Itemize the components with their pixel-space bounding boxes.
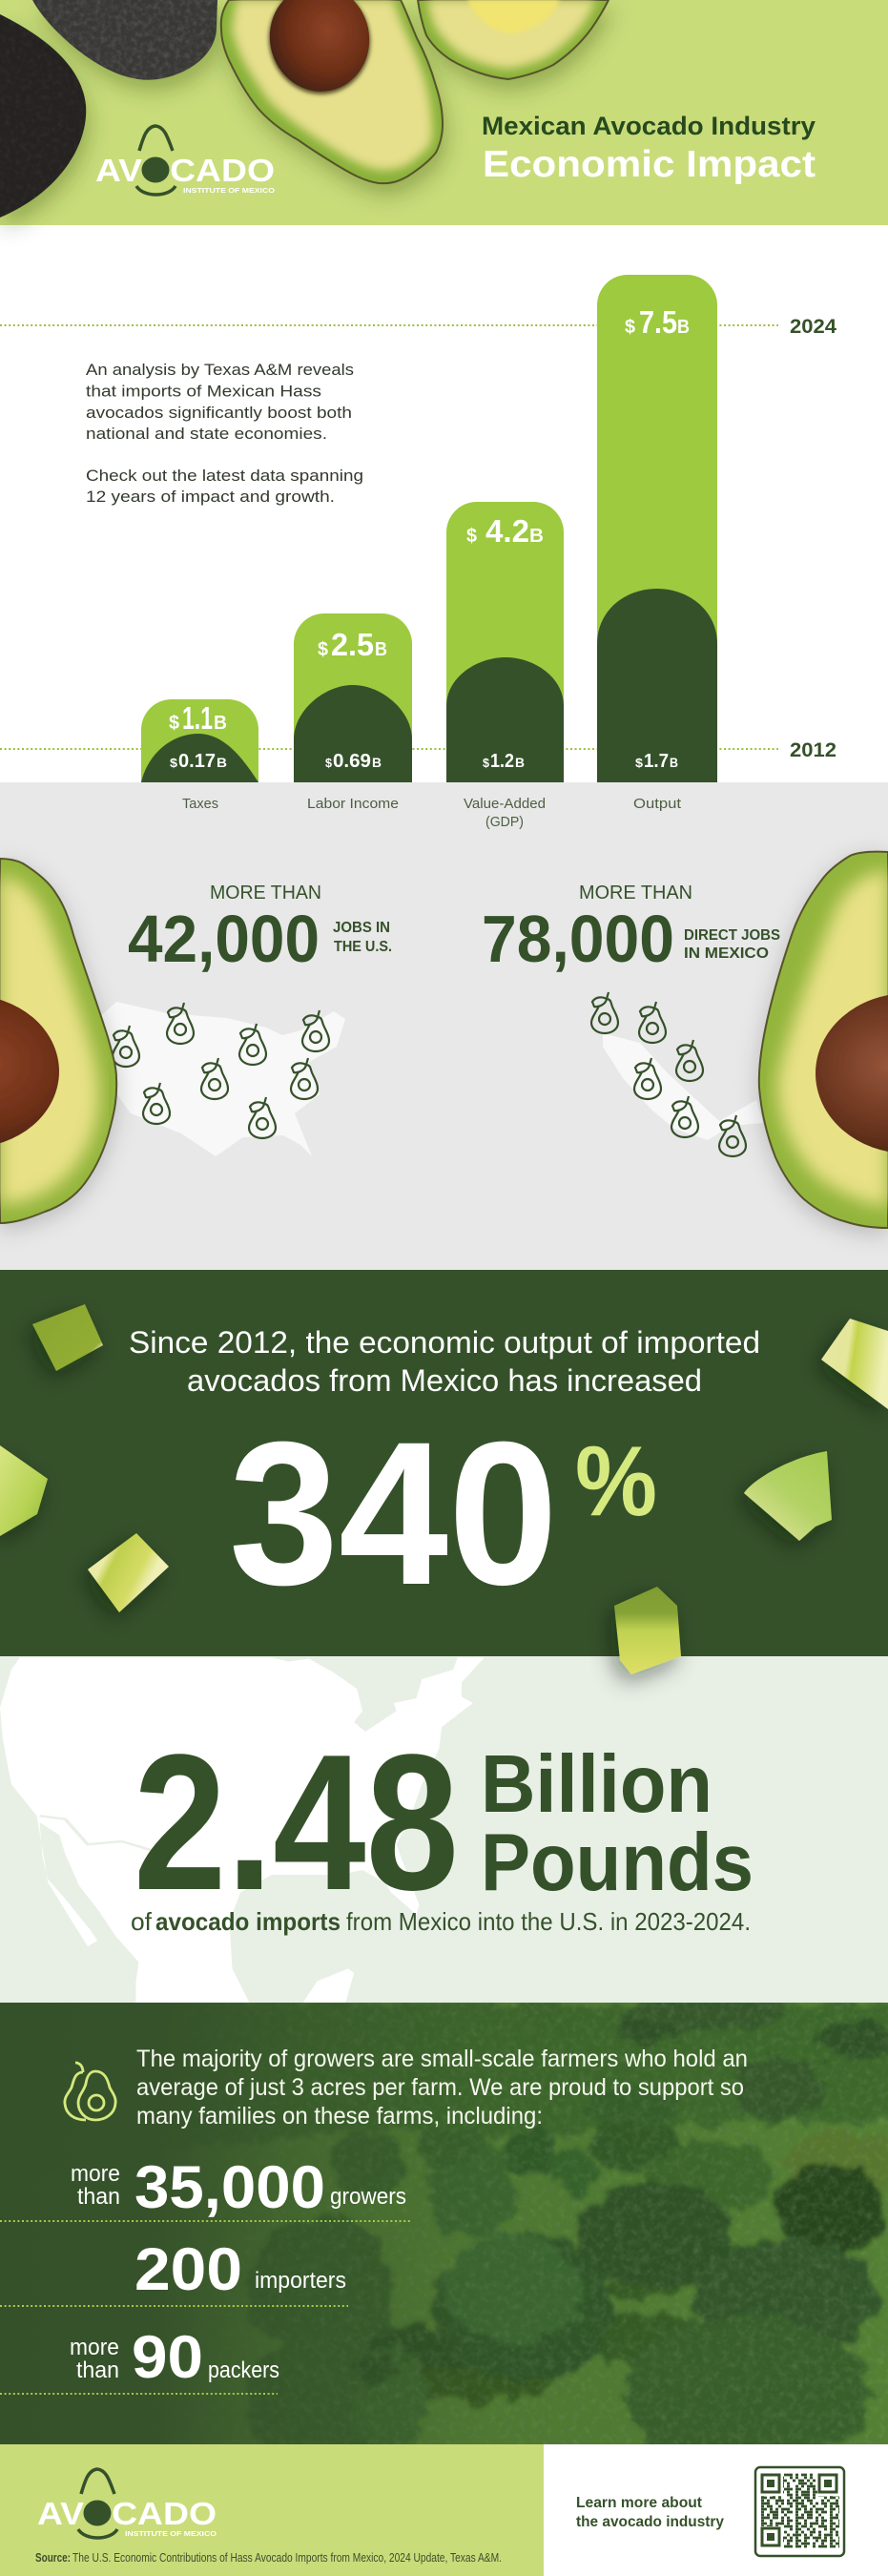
axis labels: (GDP) — [485, 815, 524, 830]
axis labels: Labor Income — [307, 797, 399, 812]
footer logo — [37, 2469, 217, 2538]
stat: 42,000 jobs in the U.S.: MORE THAN — [210, 882, 321, 904]
photo: whole dark avocado top — [29, 0, 219, 86]
photo: avocado chunk left — [0, 1445, 48, 1536]
stat: 90 packers: more — [70, 2335, 119, 2360]
caption: of — [131, 1907, 153, 1936]
intro text: 12 years of impact and growth. — [86, 488, 335, 506]
bar: Value-Added (GDP): 4.2 — [485, 513, 529, 549]
grower text: average of just 3 acres per farm. We are proud to support so — [136, 2074, 744, 2101]
stat: 42,000 jobs in the U.S.: THE U.S. — [334, 939, 392, 955]
bar: Output: 7.5 — [639, 304, 677, 340]
call to action — [576, 2495, 724, 2530]
axis labels: Taxes — [182, 797, 218, 812]
title — [482, 112, 816, 185]
bar: Value-Added (GDP): $ — [483, 756, 490, 770]
panel: orchard photo — [0, 1996, 888, 2470]
photo: avocado half left — [0, 859, 116, 1223]
bar: Taxes — [141, 699, 258, 782]
stat: 35,000 growers: 35,000 — [134, 2154, 325, 2221]
icon: avocado pair — [65, 2063, 115, 2120]
photo: halved avocado top right — [418, 0, 609, 79]
bar: Output: B — [677, 317, 690, 338]
logo: Avocado Institute of Mexico: INSTITUTE OF MEXICO — [183, 186, 275, 195]
bar: Taxes: B — [217, 755, 227, 770]
bar: Labor Income — [294, 613, 412, 782]
grower text: The majority of growers are small-scale farmers who hold an — [136, 2046, 748, 2072]
stat: 78,000 direct jobs in Mexico — [482, 882, 780, 976]
photo: avocado chunk lower left — [88, 1533, 169, 1612]
source: The U.S. Economic Contributions of Hass Avocado Imports from Mexico, 2024 Update, Texas A&M. — [72, 2551, 502, 2565]
stat: 2.48 billion pounds: Pounds — [481, 1818, 754, 1908]
bar: Labor Income: B — [375, 639, 387, 660]
stat: 90 packers: than — [76, 2358, 119, 2383]
bar: Labor Income: $ — [325, 756, 333, 770]
bar: Output: $ — [635, 756, 644, 770]
stat: 35,000 growers: than — [77, 2184, 120, 2210]
bar: Value-Added (GDP): 1.2 — [490, 751, 514, 772]
callout text: avocados from Mexico has increased — [187, 1363, 702, 1398]
bar: Value-Added (GDP): B — [515, 755, 525, 770]
bar: Taxes: $ — [169, 713, 179, 734]
stat: 200 importers: importers — [255, 2268, 346, 2294]
intro text: avocados significantly boost both — [86, 404, 352, 422]
bar: Value-Added (GDP): B — [529, 526, 544, 547]
stat: 78,000 direct jobs in Mexico: DIRECT JOBS — [684, 927, 780, 944]
intro text: Check out the latest data spanning — [86, 467, 363, 485]
title: Economic Impact — [483, 144, 816, 185]
panel: imports background with map — [0, 1656, 888, 2003]
stat: 78,000 direct jobs in Mexico: IN MEXICO — [684, 945, 769, 962]
bar: Taxes: $ — [170, 756, 178, 770]
grower text: many families on these farms, including: — [136, 2103, 543, 2129]
QR code — [755, 2467, 844, 2556]
stat: 2.48 billion pounds: Billion — [481, 1739, 712, 1830]
jobs panel background — [0, 782, 888, 1270]
stat: 78,000 direct jobs in Mexico: MORE THAN — [579, 882, 692, 904]
map: Mexico with avocado icons — [591, 992, 763, 1156]
bar chart: economic contributions 2012 vs 2024 — [0, 275, 836, 782]
stat: 35,000 growers — [0, 2154, 410, 2221]
photo: avocado chunk top right — [821, 1319, 888, 1409]
bar: Labor Income: $ — [318, 639, 328, 660]
callout text — [129, 1325, 760, 1398]
footer — [0, 2444, 888, 2576]
bar: Taxes: B — [214, 713, 227, 734]
stat: 90 packers — [0, 2324, 279, 2394]
photo: halved avocado with pit — [221, 0, 443, 183]
stat: 90 packers: packers — [208, 2358, 279, 2383]
axis labels: Output — [633, 797, 681, 812]
intro text: An analysis by Texas A&M reveals — [86, 361, 354, 379]
header banner — [0, 0, 888, 225]
percent sign: % — [575, 1426, 657, 1537]
stat: 35,000 growers: more — [71, 2161, 120, 2187]
call to action: Learn more about — [576, 2495, 702, 2511]
caption — [131, 1907, 751, 1936]
grower text — [136, 2046, 748, 2129]
photo: avocado chunk bottom — [614, 1587, 681, 1674]
photo: avocado chunk top left — [32, 1304, 103, 1371]
stat: 90 packers: 90 — [132, 2324, 203, 2391]
stat: 42,000 jobs in the U.S. — [128, 882, 392, 976]
callout text: Since 2012, the economic output of imported — [129, 1325, 760, 1360]
stat: 200 importers: 200 — [134, 2236, 242, 2303]
reference line: 2024: 2024 — [790, 316, 836, 338]
source: Source: — [35, 2551, 71, 2565]
stat: 42,000 jobs in the U.S.: 42,000 — [128, 902, 320, 976]
axis labels: Value-Added — [464, 797, 546, 812]
footer logo: AVOCADO — [37, 2496, 217, 2531]
call to action: the avocado industry — [576, 2514, 724, 2530]
photo: avocado half right — [759, 852, 888, 1228]
bar: Labor Income: 2.5 — [331, 627, 374, 662]
bar: Output: 1.7 — [644, 751, 669, 772]
axis labels — [182, 797, 681, 830]
stat: 35,000 growers: growers — [330, 2184, 406, 2210]
bar: Output: B — [670, 755, 678, 770]
photo: whole dark avocado left — [0, 0, 95, 225]
stat: 42,000 jobs in the U.S.: JOBS IN — [333, 920, 390, 936]
bar: Taxes: 0.17 — [178, 751, 216, 772]
bar: Labor Income: 0.69 — [333, 751, 371, 772]
title: Mexican Avocado Industry — [482, 112, 816, 140]
intro text: that imports of Mexican Hass — [86, 382, 321, 401]
photo: avocado chunk right — [744, 1451, 832, 1541]
bar: Output: $ — [625, 317, 635, 338]
stat: 2.48 billion pounds: 2.48 — [134, 1714, 459, 1931]
caption: avocado imports — [155, 1907, 341, 1936]
map: United States with avocado icons — [95, 1002, 345, 1156]
reference line: 2012: 2012 — [790, 739, 836, 761]
bar: Labor Income: B — [372, 755, 382, 770]
stat: 2.48 billion pounds — [131, 1714, 754, 1936]
caption: from Mexico into the U.S. in 2023-2024. — [346, 1907, 751, 1936]
intro text — [86, 361, 363, 506]
bar: Value-Added (GDP) — [446, 502, 564, 782]
intro text: national and state economies. — [86, 425, 327, 443]
big number: 340 — [229, 1400, 558, 1628]
footer logo: INSTITUTE OF MEXICO — [125, 2529, 217, 2538]
logo: Avocado Institute of Mexico — [95, 126, 275, 195]
stat: 78,000 direct jobs in Mexico: 78,000 — [482, 902, 674, 976]
bar: Output — [597, 275, 717, 782]
stat: 200 importers — [0, 2236, 348, 2306]
panel: 340% increase — [0, 1270, 888, 1656]
bar: Taxes: 1.1 — [182, 700, 213, 736]
logo: Avocado Institute of Mexico: AVOCADO — [95, 153, 275, 188]
bar: Value-Added (GDP): $ — [466, 526, 477, 547]
